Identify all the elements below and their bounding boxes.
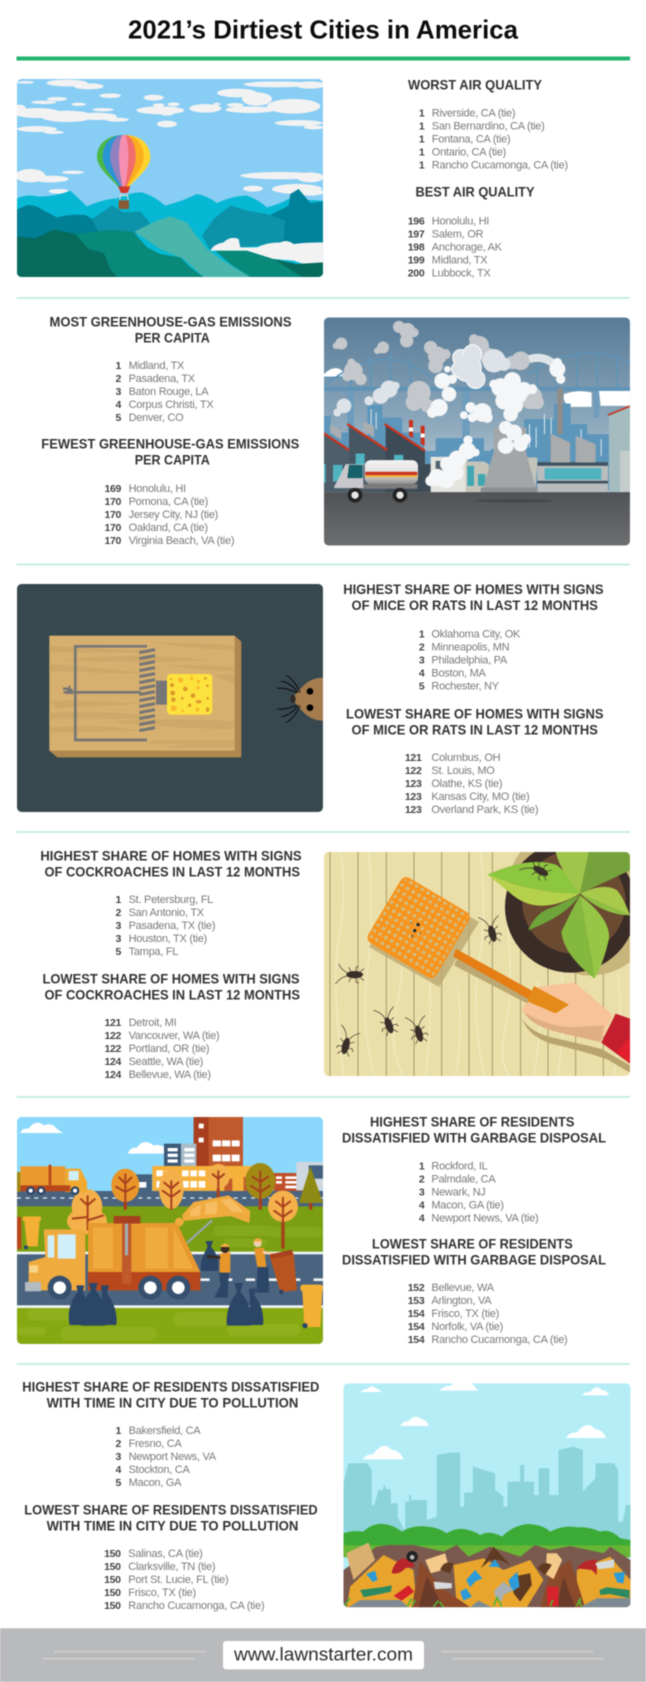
list: highest pollution	[116, 1425, 217, 1489]
icons: cockroaches	[334, 853, 554, 1058]
list: lowest garbage disposal: Rancho Cucamonga, CA (tie)	[431, 1334, 567, 1346]
title: 2021’s Dirtiest Cities in America	[128, 14, 519, 44]
list: best air quality: Midland, TX	[432, 255, 488, 267]
heading: lowest cockroaches: OF COCKROACHES IN LAST 12 MONTHS	[44, 988, 300, 1003]
list: lowest pollution: Frisco, TX (tie)	[128, 1587, 196, 1599]
list: most emissions: Corpus Christi, TX	[129, 399, 214, 411]
heading: highest pollution: WITH TIME IN CITY DUE TO POLLUTION	[47, 1395, 298, 1410]
list: lowest cockroaches: 122	[104, 1043, 122, 1055]
list: fewest emissions: 170	[104, 535, 122, 547]
list: best air quality	[408, 216, 503, 280]
list: lowest cockroaches: 124	[104, 1056, 122, 1068]
list: lowest cockroaches: Bellevue, WA (tie)	[129, 1069, 211, 1081]
list: most emissions: Pasadena, TX	[129, 373, 196, 385]
list: worst air quality: 1	[419, 108, 425, 120]
list: lowest cockroaches	[104, 1017, 219, 1081]
list: lowest pollution: Clarksville, TN (tie)	[128, 1561, 215, 1573]
list: highest cockroaches: 1	[116, 894, 122, 906]
icons: workers	[207, 1238, 278, 1298]
list: highest pollution: Macon, GA	[129, 1477, 182, 1489]
list: lowest cockroaches: 124	[104, 1069, 122, 1081]
list: highest mice or rats: Boston, MA	[431, 668, 486, 680]
list: lowest cockroaches: Seattle, WA (tie)	[129, 1056, 203, 1068]
icons: wheeled bins	[17, 1216, 323, 1328]
list: highest garbage disposal: Rockford, IL	[431, 1161, 488, 1173]
heading: highest cockroaches: OF COCKROACHES IN LAST 12 MONTHS	[44, 864, 300, 879]
list: lowest mice or rats: 123	[405, 778, 422, 790]
list: fewest emissions: 169	[104, 483, 122, 495]
list: highest garbage disposal: 2	[419, 1174, 425, 1186]
list: lowest mice or rats: Kansas City, MO (tie)	[431, 791, 529, 803]
list: most emissions: 5	[116, 412, 122, 424]
heading: lowest pollution: LOWEST SHARE OF RESIDENTS DISSATISFIED	[24, 1503, 318, 1518]
list: lowest cockroaches: Portland, OR (tie)	[129, 1043, 209, 1055]
icon: bushes	[344, 1524, 630, 1550]
heading: highest pollution: HIGHEST SHARE OF RESIDENTS DISSATISFIED	[22, 1379, 319, 1394]
list: best air quality: 197	[408, 229, 425, 241]
icon: main garbage truck	[25, 1195, 250, 1300]
list: fewest emissions: 170	[104, 496, 122, 508]
list: highest pollution: Newport News, VA	[129, 1451, 217, 1463]
illustration: hot air balloon over mountains	[13, 79, 325, 277]
list: most emissions: 4	[116, 399, 122, 411]
list: highest pollution: 1	[116, 1425, 122, 1437]
heading: fewest emissions: FEWEST GREENHOUSE-GAS EMISSIONS	[41, 437, 299, 452]
list: worst air quality: 1	[419, 121, 425, 133]
list: lowest pollution: 150	[104, 1574, 121, 1586]
list: highest cockroaches: 3	[116, 920, 122, 932]
list: worst air quality: Ontario, CA (tie)	[432, 147, 506, 159]
heading: worst air quality: WORST AIR QUALITY	[408, 77, 542, 92]
list: best air quality: 198	[408, 242, 425, 254]
list: highest mice or rats: Minneapolis, MN	[431, 642, 510, 654]
heading: highest cockroaches: HIGHEST SHARE OF HOMES WITH SIGNS	[40, 848, 302, 863]
list: lowest garbage disposal: Bellevue, WA	[431, 1282, 495, 1294]
list: lowest mice or rats	[405, 752, 538, 816]
list: fewest emissions: Oakland, CA (tie)	[129, 522, 208, 534]
list: most emissions: 2	[116, 373, 122, 385]
list: worst air quality: San Bernardino, CA (tie)	[432, 121, 545, 133]
list: fewest emissions: 170	[104, 522, 122, 534]
website button: www.lawnstarter.com	[233, 1644, 413, 1664]
list: most emissions: 1	[116, 360, 122, 372]
list: lowest garbage disposal: 153	[408, 1295, 425, 1307]
list: highest garbage disposal	[419, 1161, 538, 1225]
list: lowest mice or rats: 123	[405, 791, 422, 803]
list: lowest pollution: Rancho Cucamonga, CA (tie)	[128, 1600, 264, 1612]
icons: trees	[12, 1163, 323, 1249]
illustration: mousetrap and mouse	[17, 584, 323, 812]
list: worst air quality: Rancho Cucamonga, CA (tie)	[432, 160, 568, 172]
list: highest garbage disposal: 1	[419, 1161, 425, 1173]
heading: highest mice or rats: OF MICE OR RATS IN LAST 12 MONTHS	[352, 598, 598, 613]
list: fewest emissions: 170	[104, 509, 122, 521]
icon: cheese	[167, 674, 212, 715]
list: highest pollution: 3	[116, 1451, 122, 1463]
list: best air quality: 200	[408, 268, 425, 280]
list: lowest mice or rats: St. Louis, MO	[431, 765, 495, 777]
list: worst air quality: 1	[419, 160, 425, 172]
list: highest cockroaches: St. Petersburg, FL	[129, 894, 213, 906]
list: lowest cockroaches: Vancouver, WA (tie)	[129, 1030, 219, 1042]
list: lowest mice or rats: Overland Park, KS (tie)	[431, 804, 538, 816]
list: highest pollution: Bakersfield, CA	[129, 1425, 201, 1437]
icon: trash heap	[344, 1543, 630, 1607]
list: highest mice or rats: Rochester, NY	[431, 681, 500, 693]
list: lowest cockroaches: Detroit, MI	[129, 1017, 177, 1029]
panel: pollution	[22, 1379, 630, 1612]
list: highest pollution: Fresno, CA	[129, 1438, 182, 1450]
list: highest pollution: 2	[116, 1438, 122, 1450]
heading: lowest mice or rats: LOWEST SHARE OF HOMES WITH SIGNS	[346, 706, 604, 721]
icon: distant garbage truck	[20, 1165, 87, 1195]
list: highest garbage disposal: Newport News, VA (tie)	[431, 1213, 538, 1225]
icons: trash bags	[69, 1241, 263, 1326]
list: highest mice or rats: 4	[419, 668, 425, 680]
list: lowest garbage disposal	[408, 1282, 567, 1346]
website button	[223, 1641, 424, 1669]
list: lowest mice or rats: 123	[405, 804, 422, 816]
list: lowest garbage disposal: 154	[408, 1308, 425, 1320]
heading: best air quality: BEST AIR QUALITY	[416, 185, 534, 200]
list: lowest garbage disposal: Norfolk, VA (tie)	[431, 1321, 503, 1333]
list: most emissions: Denver, CO	[129, 412, 184, 424]
illustration: fly swatter and roaches	[324, 841, 636, 1076]
list: lowest mice or rats: Columbus, OH	[431, 752, 501, 764]
list: highest mice or rats: 5	[419, 681, 425, 693]
heading: lowest pollution: WITH TIME IN CITY DUE TO POLLUTION	[47, 1519, 298, 1534]
list: lowest pollution: Salinas, CA (tie)	[128, 1548, 203, 1560]
heading: most emissions: PER CAPITA	[135, 331, 210, 346]
icon: city buildings	[135, 1117, 323, 1191]
list: best air quality: Honolulu, HI	[432, 216, 489, 228]
heading: highest garbage disposal: DISSATISFIED WITH GARBAGE DISPOSAL	[342, 1131, 606, 1146]
list: highest garbage disposal: 4	[419, 1200, 425, 1212]
list: lowest pollution: 150	[104, 1561, 121, 1573]
panel: garbage disposal	[12, 1115, 606, 1346]
list: lowest cockroaches: 121	[104, 1017, 122, 1029]
list: highest cockroaches: Houston, TX (tie)	[129, 933, 207, 945]
heading: highest garbage disposal: HIGHEST SHARE OF RESIDENTS	[370, 1115, 574, 1130]
list: highest mice or rats: 1	[419, 629, 425, 641]
list: fewest emissions: Jersey City, NJ (tie)	[129, 509, 218, 521]
list: highest cockroaches: Pasadena, TX (tie)	[129, 920, 215, 932]
panel: air quality	[13, 77, 568, 280]
list: fewest emissions: Honolulu, HI	[129, 483, 186, 495]
list: highest garbage disposal: Macon, GA (tie)	[431, 1200, 504, 1212]
list: most emissions: Midland, TX	[129, 360, 185, 372]
list: most emissions: 3	[116, 386, 122, 398]
list: lowest mice or rats: 122	[405, 765, 422, 777]
list: highest cockroaches: San Antonio, TX	[129, 907, 205, 919]
list: highest pollution: 5	[116, 1477, 122, 1489]
list: highest mice or rats: Philadelphia, PA	[431, 655, 508, 667]
heading: lowest garbage disposal: DISSATISFIED WITH GARBAGE DISPOSAL	[342, 1252, 606, 1267]
list: best air quality: Lubbock, TX	[432, 268, 491, 280]
list: worst air quality: Fontana, CA (tie)	[432, 134, 510, 146]
icon: wooden trap	[49, 636, 241, 757]
icon: smoke clouds	[333, 321, 565, 488]
list: highest cockroaches	[116, 894, 215, 958]
list: highest garbage disposal: 4	[419, 1213, 425, 1225]
list: lowest cockroaches: 122	[104, 1030, 122, 1042]
list: worst air quality: Riverside, CA (tie)	[432, 108, 515, 120]
icon: potted plant	[487, 841, 636, 979]
list: best air quality: 196	[408, 216, 425, 228]
list: worst air quality: 1	[419, 147, 425, 159]
list: lowest pollution: Port St. Lucie, FL (tie)	[128, 1574, 228, 1586]
list: best air quality: 199	[408, 255, 425, 267]
list: highest cockroaches: 5	[116, 946, 122, 958]
list: highest pollution: 4	[116, 1464, 122, 1476]
icon: balloon	[97, 135, 150, 209]
list: highest mice or rats	[419, 629, 521, 693]
heading: highest mice or rats: HIGHEST SHARE OF HOMES WITH SIGNS	[343, 582, 604, 597]
list: lowest garbage disposal: 154	[408, 1334, 425, 1346]
list: highest mice or rats: Oklahoma City, OK	[431, 629, 521, 641]
heading: lowest garbage disposal: LOWEST SHARE OF RESIDENTS	[372, 1236, 573, 1251]
heading: most emissions: MOST GREENHOUSE-GAS EMISSIONS	[50, 315, 292, 330]
icon: mouse	[277, 675, 323, 722]
list: fewest emissions	[104, 483, 234, 547]
illustration: skyline and trash heap	[344, 1383, 630, 1607]
panel: greenhouse-gas emissions	[41, 315, 630, 547]
list: fewest emissions: Virginia Beach, VA (tie)	[129, 535, 234, 547]
list: fewest emissions: Pomona, CA (tie)	[129, 496, 208, 508]
list: highest pollution: Stockton, CA	[129, 1464, 190, 1476]
list: lowest pollution: 150	[104, 1600, 121, 1612]
footer band	[0, 1628, 646, 1682]
list: highest garbage disposal: Newark, NJ	[431, 1187, 486, 1199]
list: lowest pollution: 150	[104, 1587, 121, 1599]
icon: tanker truck	[334, 460, 418, 502]
list: lowest mice or rats: Olathe, KS (tie)	[431, 778, 502, 790]
icon: hand	[522, 983, 630, 1064]
list: best air quality: Salem, OR	[432, 229, 483, 241]
list: lowest mice or rats: 121	[405, 752, 422, 764]
list: highest cockroaches: Tampa, FL	[129, 946, 178, 958]
heading: fewest emissions: PER CAPITA	[135, 453, 210, 468]
list: best air quality: Anchorage, AK	[432, 242, 503, 254]
icon: fly swatter	[365, 875, 533, 1000]
list: highest cockroaches: 3	[116, 933, 122, 945]
title rule	[16, 56, 630, 60]
heading: lowest cockroaches: LOWEST SHARE OF HOMES WITH SIGNS	[42, 972, 300, 987]
panel: cockroaches	[40, 841, 636, 1081]
list: highest garbage disposal: 3	[419, 1187, 425, 1199]
list: highest cockroaches: 2	[116, 907, 122, 919]
list: most emissions: Baton Rouge, LA	[129, 386, 209, 398]
list: lowest garbage disposal: 152	[408, 1282, 425, 1294]
panel: mice or rats	[17, 582, 604, 816]
list: highest garbage disposal: Palmdale, CA	[431, 1174, 496, 1186]
list: lowest pollution: 150	[104, 1548, 121, 1560]
list: lowest pollution	[104, 1548, 264, 1612]
list: lowest garbage disposal: Arlington, VA	[431, 1295, 492, 1307]
list: most emissions	[116, 360, 214, 424]
list: highest mice or rats: 2	[419, 642, 425, 654]
illustration: garbage truck street scene	[12, 1117, 323, 1344]
illustration: factories and smoke	[324, 318, 630, 545]
list: worst air quality	[419, 108, 568, 172]
list: lowest garbage disposal: Frisco, TX (tie)	[431, 1308, 499, 1320]
list: worst air quality: 1	[419, 134, 425, 146]
list: highest mice or rats: 3	[419, 655, 425, 667]
list: lowest garbage disposal: 154	[408, 1321, 425, 1333]
heading: lowest mice or rats: OF MICE OR RATS IN LAST 12 MONTHS	[352, 722, 598, 737]
